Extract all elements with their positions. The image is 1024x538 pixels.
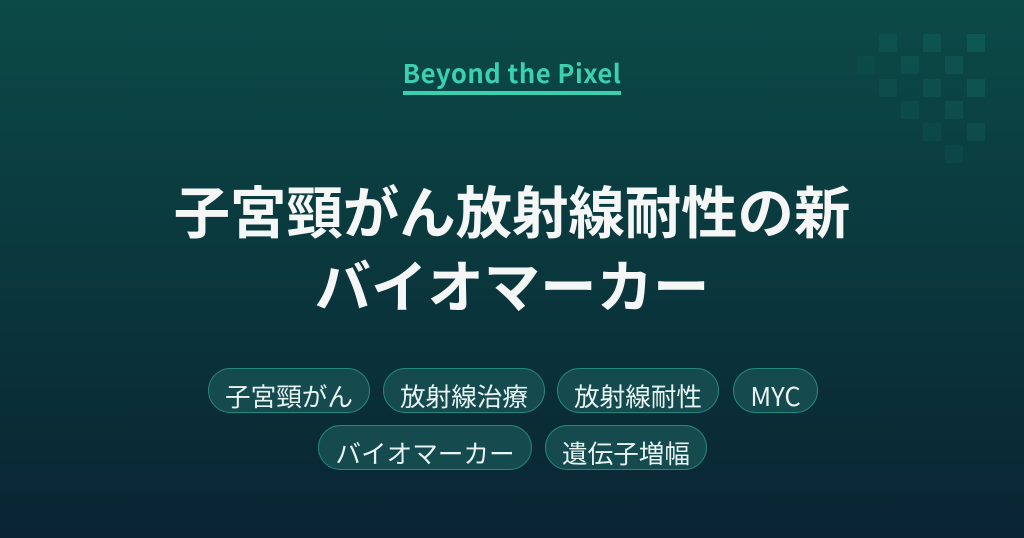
tag: MYC: MYC [750, 377, 801, 414]
tag: gene amplification [545, 425, 707, 470]
tag: gene amplification: 遺伝子増幅 [562, 434, 690, 471]
tag: radioresistance: 放射線耐性 [574, 377, 702, 414]
title: 子宮頸がん放射線耐性の新 [174, 169, 850, 250]
title [174, 169, 850, 324]
keyword tags [208, 368, 818, 471]
brand label with underline: Beyond the Pixel [403, 54, 621, 91]
tag: biomarker [318, 425, 532, 470]
tag: cervical cancer [208, 368, 370, 413]
tag: radiotherapy: 放射線治療 [400, 377, 528, 414]
decorative pixel grid [879, 34, 985, 141]
tag: radiotherapy [383, 368, 545, 413]
tag: MYC [733, 368, 818, 413]
title: バイオマーカー [315, 243, 709, 324]
tag: cervical cancer: 子宮頸がん [225, 377, 353, 414]
tag: biomarker: バイオマーカー [335, 434, 515, 471]
tag: radioresistance [557, 368, 719, 413]
